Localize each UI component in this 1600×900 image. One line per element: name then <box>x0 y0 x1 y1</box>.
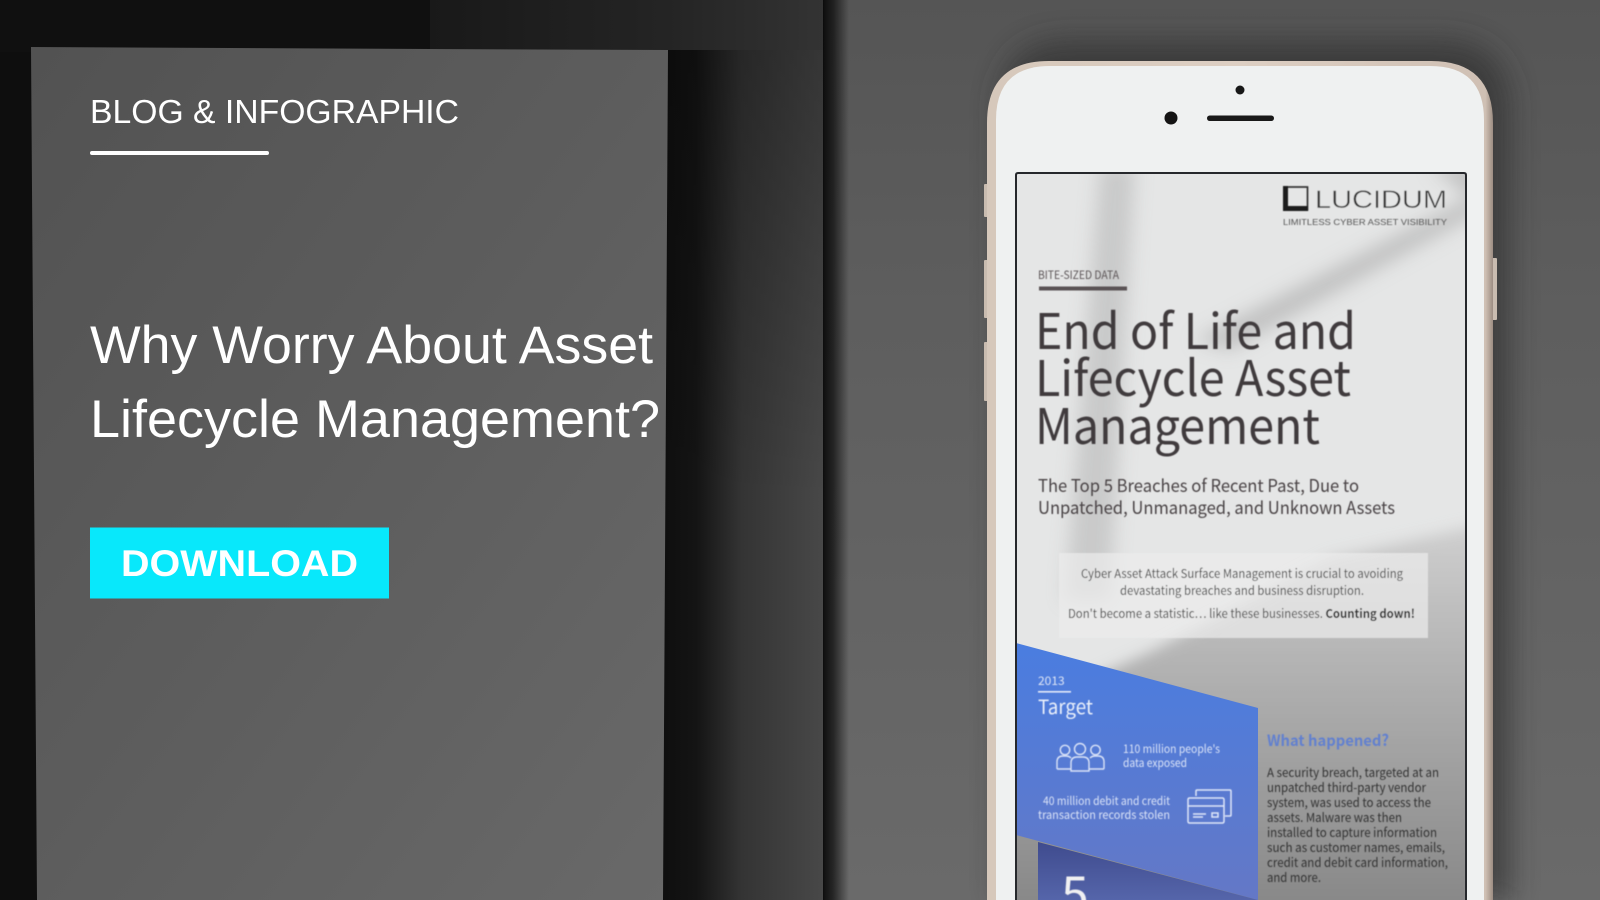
what happened body: installed to capture information <box>1267 823 1437 841</box>
people statistic: 110 million people's <box>1123 741 1220 757</box>
phone mockup <box>984 40 1510 900</box>
main title <box>90 316 660 449</box>
what happened body: system, was used to access the <box>1267 793 1431 811</box>
what happened heading: What happened? <box>1267 729 1389 751</box>
phone shadow <box>1000 40 1510 900</box>
intro callout box: Don't become a statistic… like these businesses. Counting down! <box>1068 604 1415 622</box>
infographic title: Management <box>1035 388 1320 459</box>
main title: Lifecycle Management? <box>90 390 660 449</box>
screen border <box>1016 173 1466 900</box>
lower screen shadow <box>1000 525 1480 900</box>
what happened body: credit and debit card information, <box>1267 853 1448 871</box>
what happened body: and more. <box>1267 868 1321 886</box>
Lucidum logo <box>1283 186 1447 227</box>
people statistic <box>1123 741 1220 771</box>
phone side buttons <box>984 184 1497 401</box>
infographic header, logo and title <box>1035 186 1447 638</box>
infographic title <box>1038 308 1352 458</box>
earpiece speaker <box>1207 116 1274 121</box>
people statistic: data exposed <box>1123 755 1187 771</box>
front camera <box>1164 112 1178 124</box>
infographic title: Lifecycle Asset <box>1035 340 1351 411</box>
sensor dot <box>1236 86 1244 94</box>
infographic subtitle <box>1038 473 1395 520</box>
icon: people <box>1057 744 1104 771</box>
icon: credit cards <box>1188 790 1231 823</box>
phone frame <box>987 61 1493 900</box>
what happened body: such as customer names, emails, <box>1267 838 1445 856</box>
what happened column <box>1267 729 1448 886</box>
records statistic: transaction records stolen <box>1038 807 1170 823</box>
eyebrow underline <box>90 151 269 155</box>
records statistic: 40 million debit and credit <box>1043 793 1171 809</box>
label underline <box>1039 286 1127 290</box>
phone face <box>996 66 1484 900</box>
Lucidum logo: LIMITLESS CYBER ASSET VISIBILITY <box>1283 217 1447 227</box>
background: right desk surface <box>824 0 1600 900</box>
what happened body: assets. Malware was then <box>1267 808 1402 826</box>
intro callout box: devastating breaches and business disruption. <box>1120 581 1364 599</box>
infographic title: End of Life and <box>1035 293 1356 364</box>
eyebrow label: BLOG & INFOGRAPHIC: BLOG & INFOGRAPHIC <box>90 94 459 131</box>
button: download: DOWNLOAD <box>121 543 358 584</box>
what happened body: A security breach, targeted at an <box>1267 763 1439 781</box>
window light shadows on the screen <box>1064 174 1465 554</box>
intro callout box: Cyber Asset Attack Surface Management is crucial to avoiding <box>1081 564 1403 582</box>
year: 2013 <box>1038 672 1065 689</box>
year underline <box>1038 691 1071 693</box>
button: download <box>90 528 389 598</box>
intro callout box <box>1059 553 1428 638</box>
Lucidum logo: LUCIDUM <box>1315 186 1447 214</box>
blue breach panel: Target <box>1016 643 1258 900</box>
what happened body: unpatched third-party vendor <box>1267 778 1426 796</box>
company name: Target <box>1038 691 1093 720</box>
dark number panel <box>1038 842 1258 900</box>
bite-sized data label: BITE-SIZED DATA <box>1038 267 1119 283</box>
phone screen <box>1000 165 1480 900</box>
what happened body <box>1267 763 1448 886</box>
infographic subtitle: Unpatched, Unmanaged, and Unknown Assets <box>1038 495 1395 520</box>
records statistic <box>1038 795 1170 820</box>
main title: Why Worry About Asset <box>90 316 653 375</box>
panel: dark folder on the left <box>0 0 849 900</box>
infographic subtitle: The Top 5 Breaches of Recent Past, Due to <box>1038 473 1359 498</box>
panel: grey paper sheet <box>31 47 668 900</box>
